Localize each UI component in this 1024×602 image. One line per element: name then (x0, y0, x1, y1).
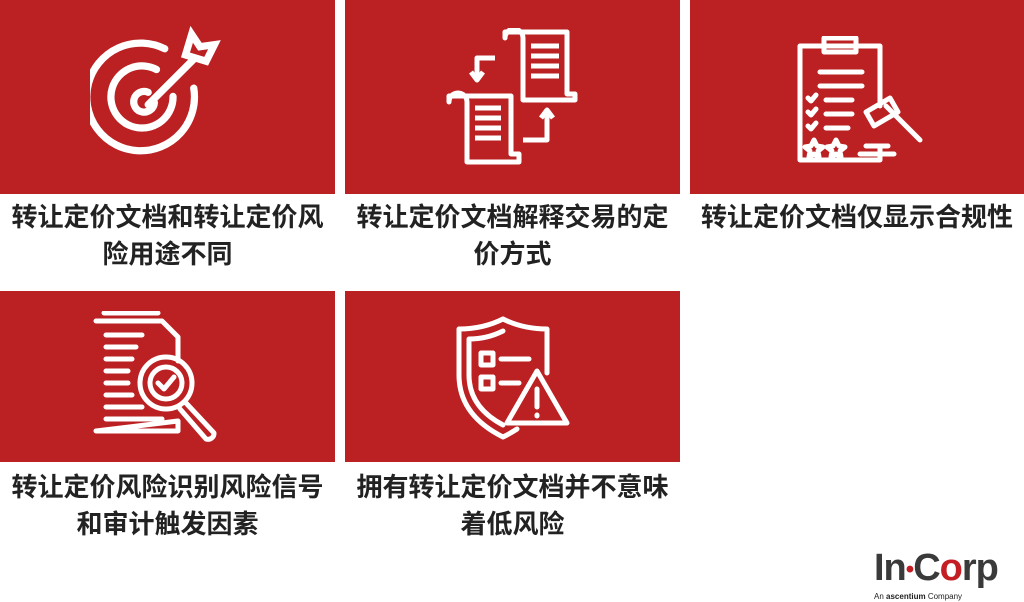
text: panel 5 (356, 472, 668, 539)
panel: documents (345, 0, 680, 194)
text: panel 5: 拥有转让定价文档并不意味 (356, 472, 668, 502)
text: panel 3: 转让定价文档仅显示合规性 (701, 202, 1013, 232)
icon: clipboard with gavel (798, 36, 922, 162)
logo: InCorp: In•Corp (874, 547, 998, 589)
text: panel 5: 着低风险 (460, 509, 564, 539)
icon: shield warning (456, 316, 570, 440)
panel: target (0, 0, 335, 194)
logo: InCorp: An ascentium Company (874, 592, 962, 601)
text: panel 1 (11, 202, 324, 269)
text: panel 2: 价方式 (473, 239, 552, 269)
text: panel 4: 转让定价风险识别风险信号 (11, 472, 324, 502)
text: panel 4: 和审计触发因素 (76, 509, 258, 539)
text: panel 2: 转让定价文档解释交易的定 (356, 202, 668, 232)
text: panel 4 (11, 472, 324, 539)
text: panel 1: 险用途不同 (102, 239, 232, 269)
icon: scrolls (446, 28, 578, 164)
text: panel 1: 转让定价文档和转让定价风 (11, 202, 324, 232)
icon: target (90, 26, 221, 154)
panel: magnifier (0, 291, 335, 462)
panel: shield (345, 291, 680, 462)
panel: clipboard (690, 0, 1024, 194)
icon: document magnifier (94, 311, 216, 442)
text: panel 2 (356, 202, 668, 269)
